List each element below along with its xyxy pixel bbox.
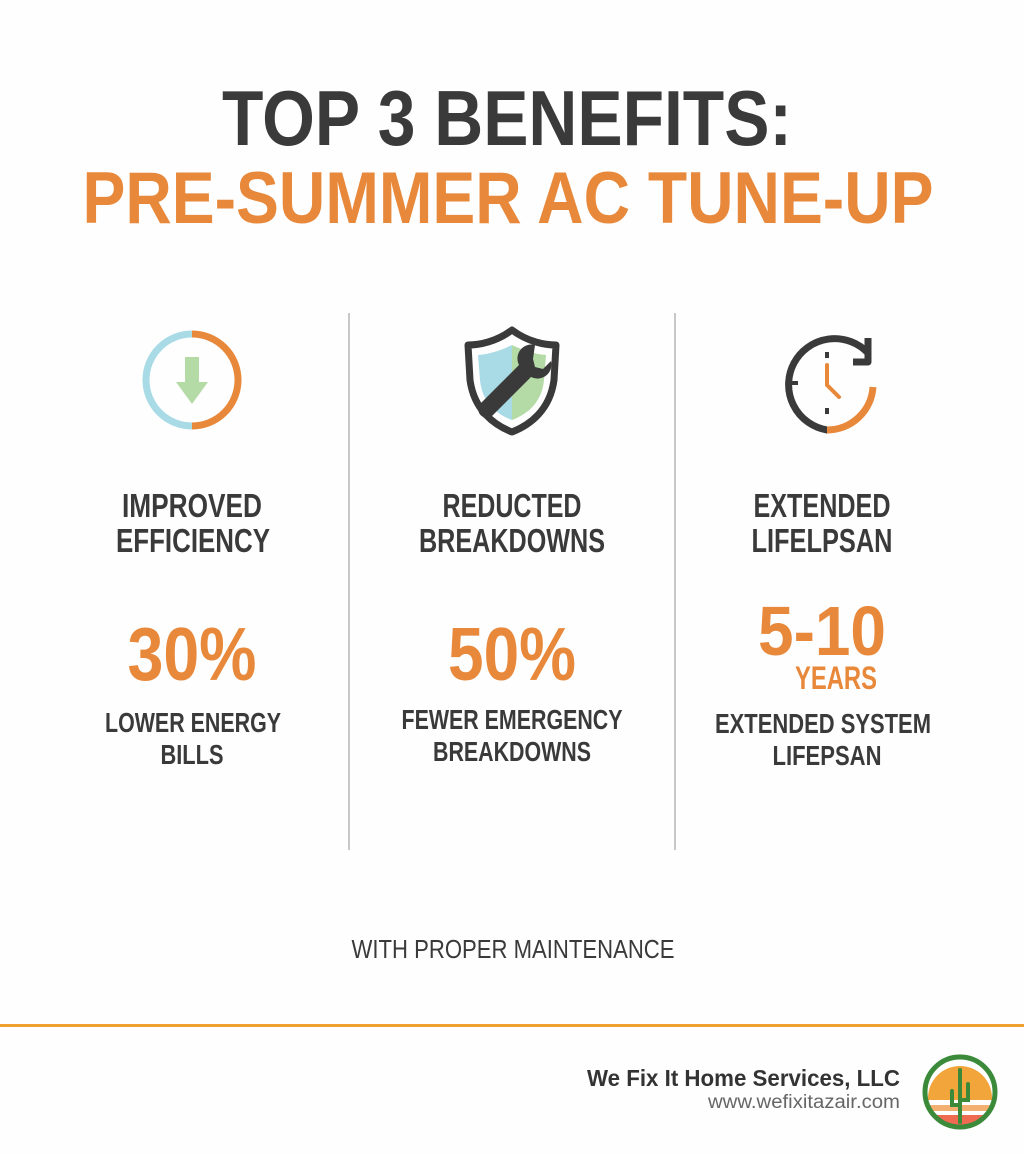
icon: shield wrench [468,330,556,432]
description: FEWER EMERGENCY [402,704,623,735]
icon: logo cactus [925,1057,995,1130]
description [402,704,623,767]
description [715,708,931,771]
heading [116,487,270,559]
description: BREAKDOWNS [433,736,591,767]
heading: LIFELPSAN [752,522,892,559]
description: LOWER ENERGY [105,707,281,738]
title: PRE-SUMMER AC TUNE-UP [82,158,934,239]
heading: EXTENDED [754,487,890,524]
heading [752,487,892,559]
stat 5-10 years: YEARS [795,660,877,696]
panel: improved efficiency [105,334,281,770]
heading: EFFICIENCY [116,522,270,559]
title [82,74,934,239]
footer company: We Fix It Home Services, LLC [587,1065,900,1091]
description [105,707,281,770]
heading: REDUCTED [442,487,582,524]
icon: efficiency circle arrow [146,334,238,426]
heading: BREAKDOWNS [419,522,605,559]
stat 30%: 30% [128,612,256,696]
stat 5-10 years: 5-10 [758,592,886,670]
footer company: www.wefixitazair.com [707,1092,900,1113]
icon: clock [789,338,873,430]
stat 50%: 50% [448,612,576,696]
heading [419,487,605,559]
description: LIFEPSAN [772,740,882,771]
panel: extended lifespan [715,338,931,771]
footnote: WITH PROPER MAINTENANCE [352,934,674,964]
heading: IMPROVED [122,487,262,524]
panel: reduced breakdowns [402,330,623,767]
footer company [587,1065,900,1113]
description: BILLS [160,739,224,770]
description: EXTENDED SYSTEM [715,708,931,739]
title: TOP 3 BENEFITS: [222,74,792,162]
